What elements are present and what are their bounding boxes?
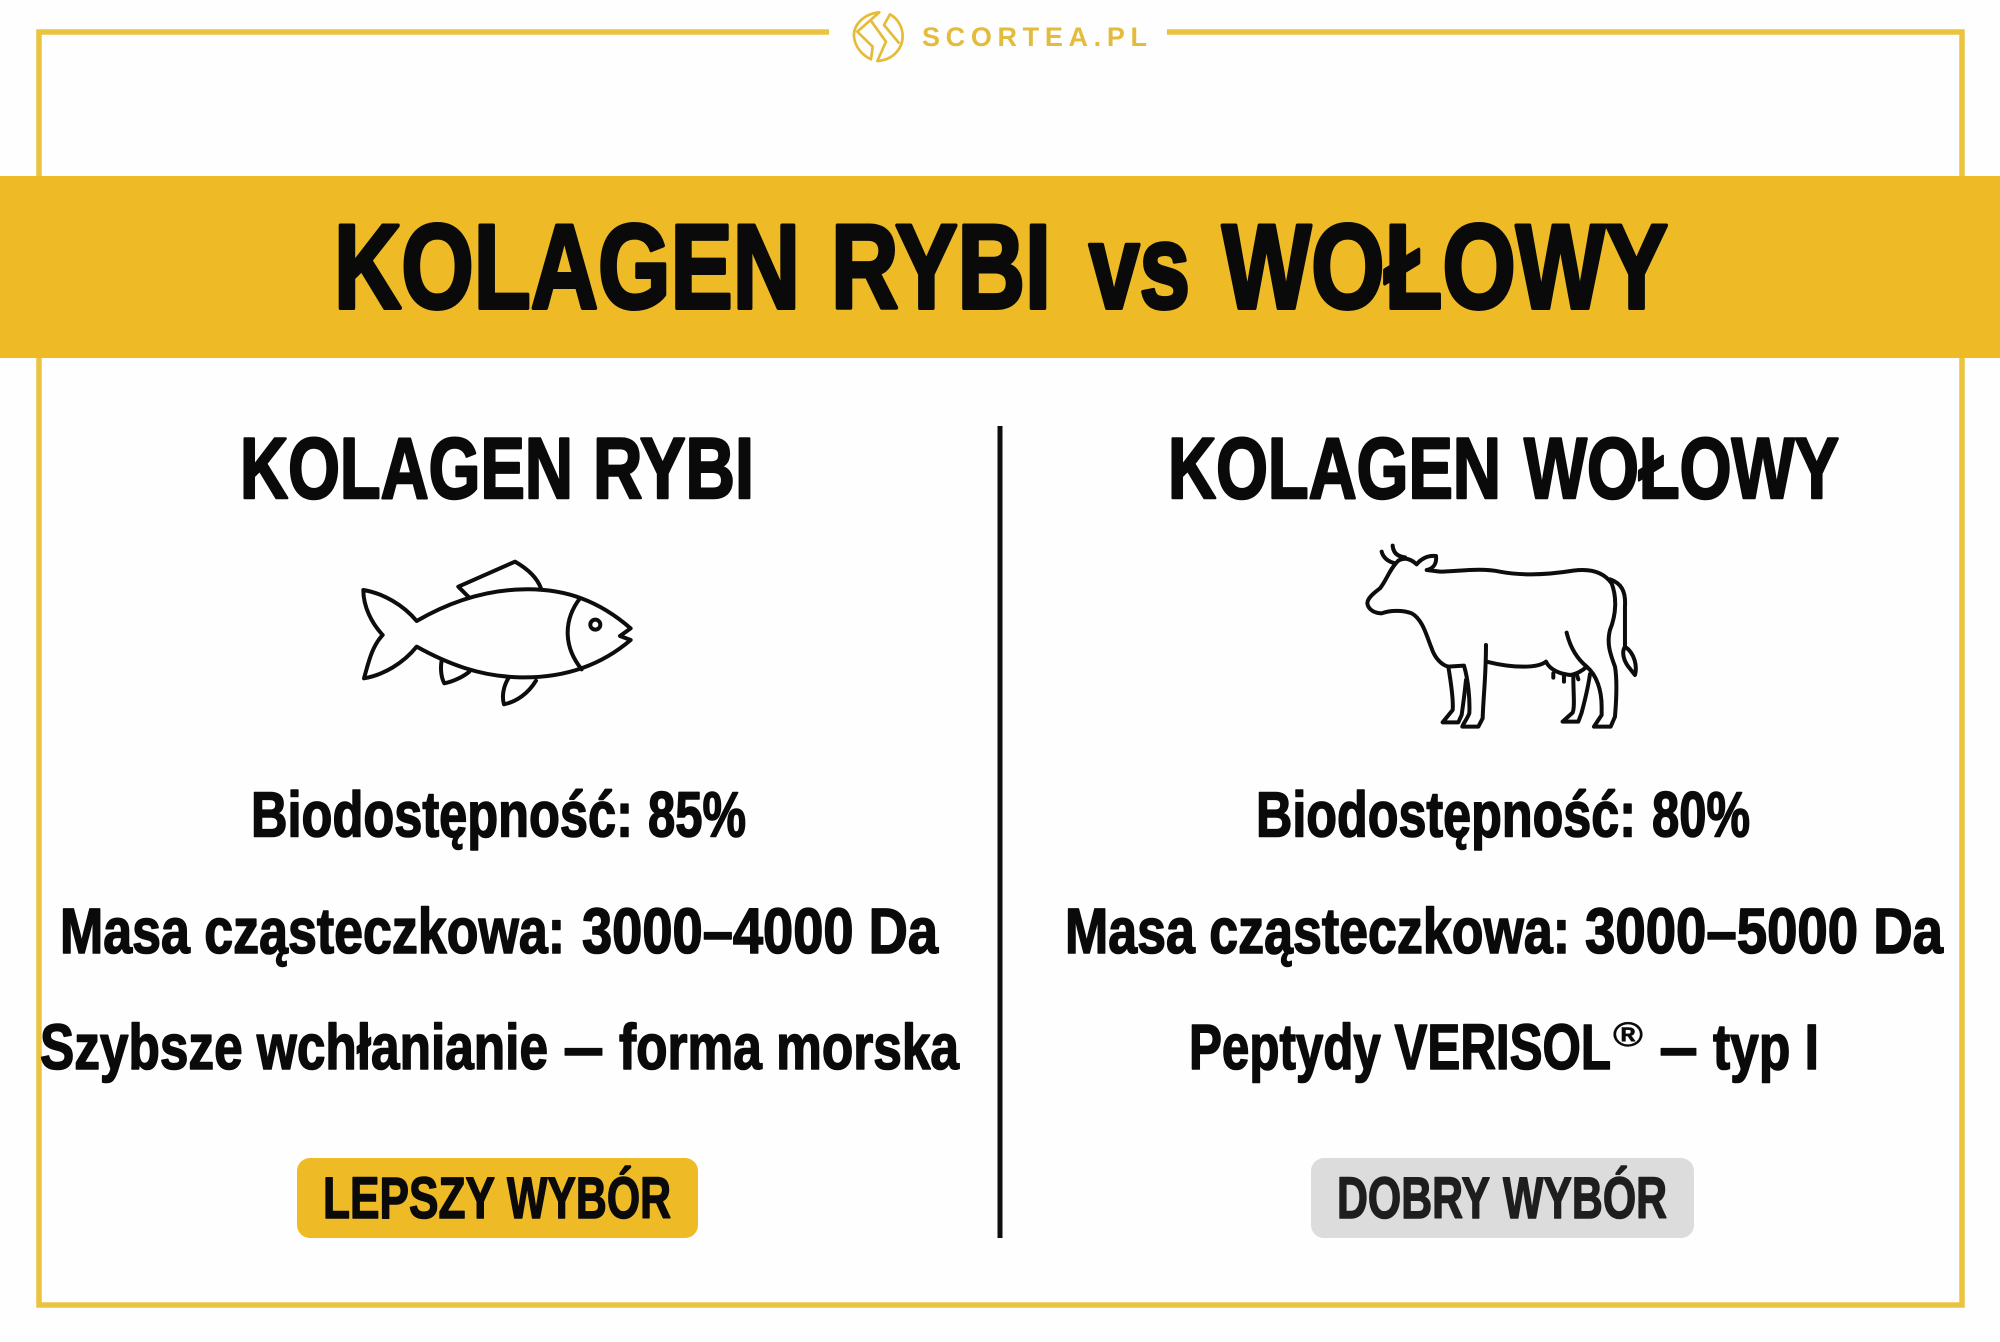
stat: verisol peptides: typ I (1713, 1011, 1819, 1083)
heading: fish collagen: KOLAGEN (240, 421, 573, 517)
stat: molecular mass: 3000–4000 Da (582, 895, 938, 967)
stat: verisol peptides: — (1661, 1011, 1696, 1083)
title: KOLAGEN (334, 200, 800, 334)
badge: better choice: WYBÓR (507, 1166, 671, 1231)
stat: verisol peptides: Peptydy VERISOL (1189, 1011, 1611, 1083)
badge: better choice (297, 1158, 698, 1238)
title: RYBI (831, 200, 1051, 334)
badge: good choice (1311, 1158, 1694, 1238)
title (334, 200, 1668, 334)
stat: faster absorption: — (565, 1011, 602, 1083)
stat: molecular mass: Masa cząsteczkowa: (60, 895, 565, 967)
heading: beef collagen: WOŁOWY (1524, 421, 1839, 517)
stat: faster absorption (40, 1011, 959, 1083)
stat: verisol peptides: ® (1613, 1016, 1643, 1054)
stat: faster absorption: forma morska (619, 1011, 959, 1083)
logo: scortea.pl (854, 12, 1147, 61)
badge: better choice: LEPSZY (323, 1166, 495, 1231)
stat: bioavailability 85%: Biodostępność: (251, 778, 633, 850)
badge: good choice: WYBÓR (1503, 1166, 1667, 1231)
heading: fish collagen: RYBI (593, 421, 754, 517)
badge: good choice: DOBRY (1337, 1166, 1490, 1231)
icon: cow (1367, 546, 1636, 727)
title banner (0, 176, 2000, 358)
panel: fish collagen (40, 421, 959, 1238)
stat: molecular mass: 3000–5000 Da (1585, 895, 1943, 967)
logo text: SCORTEA.PL (922, 22, 1147, 52)
title: vs (1089, 200, 1190, 334)
stat: bioavailability 80%: Biodostępność: (1256, 778, 1636, 850)
stat: bioavailability 80%: 80% (1652, 778, 1750, 850)
stat: faster absorption: Szybsze wchłanianie (40, 1011, 548, 1083)
icon: fish (363, 562, 631, 704)
panel: beef collagen (1065, 421, 1943, 1238)
heading: beef collagen (1168, 421, 1839, 517)
center divider (998, 426, 1002, 1238)
stat: molecular mass: Masa cząsteczkowa: (1065, 895, 1570, 967)
stat: bioavailability 85%: 85% (648, 778, 746, 850)
title: WOŁOWY (1222, 200, 1668, 334)
heading: beef collagen: KOLAGEN (1168, 421, 1501, 517)
icon: logo mark (854, 12, 903, 61)
